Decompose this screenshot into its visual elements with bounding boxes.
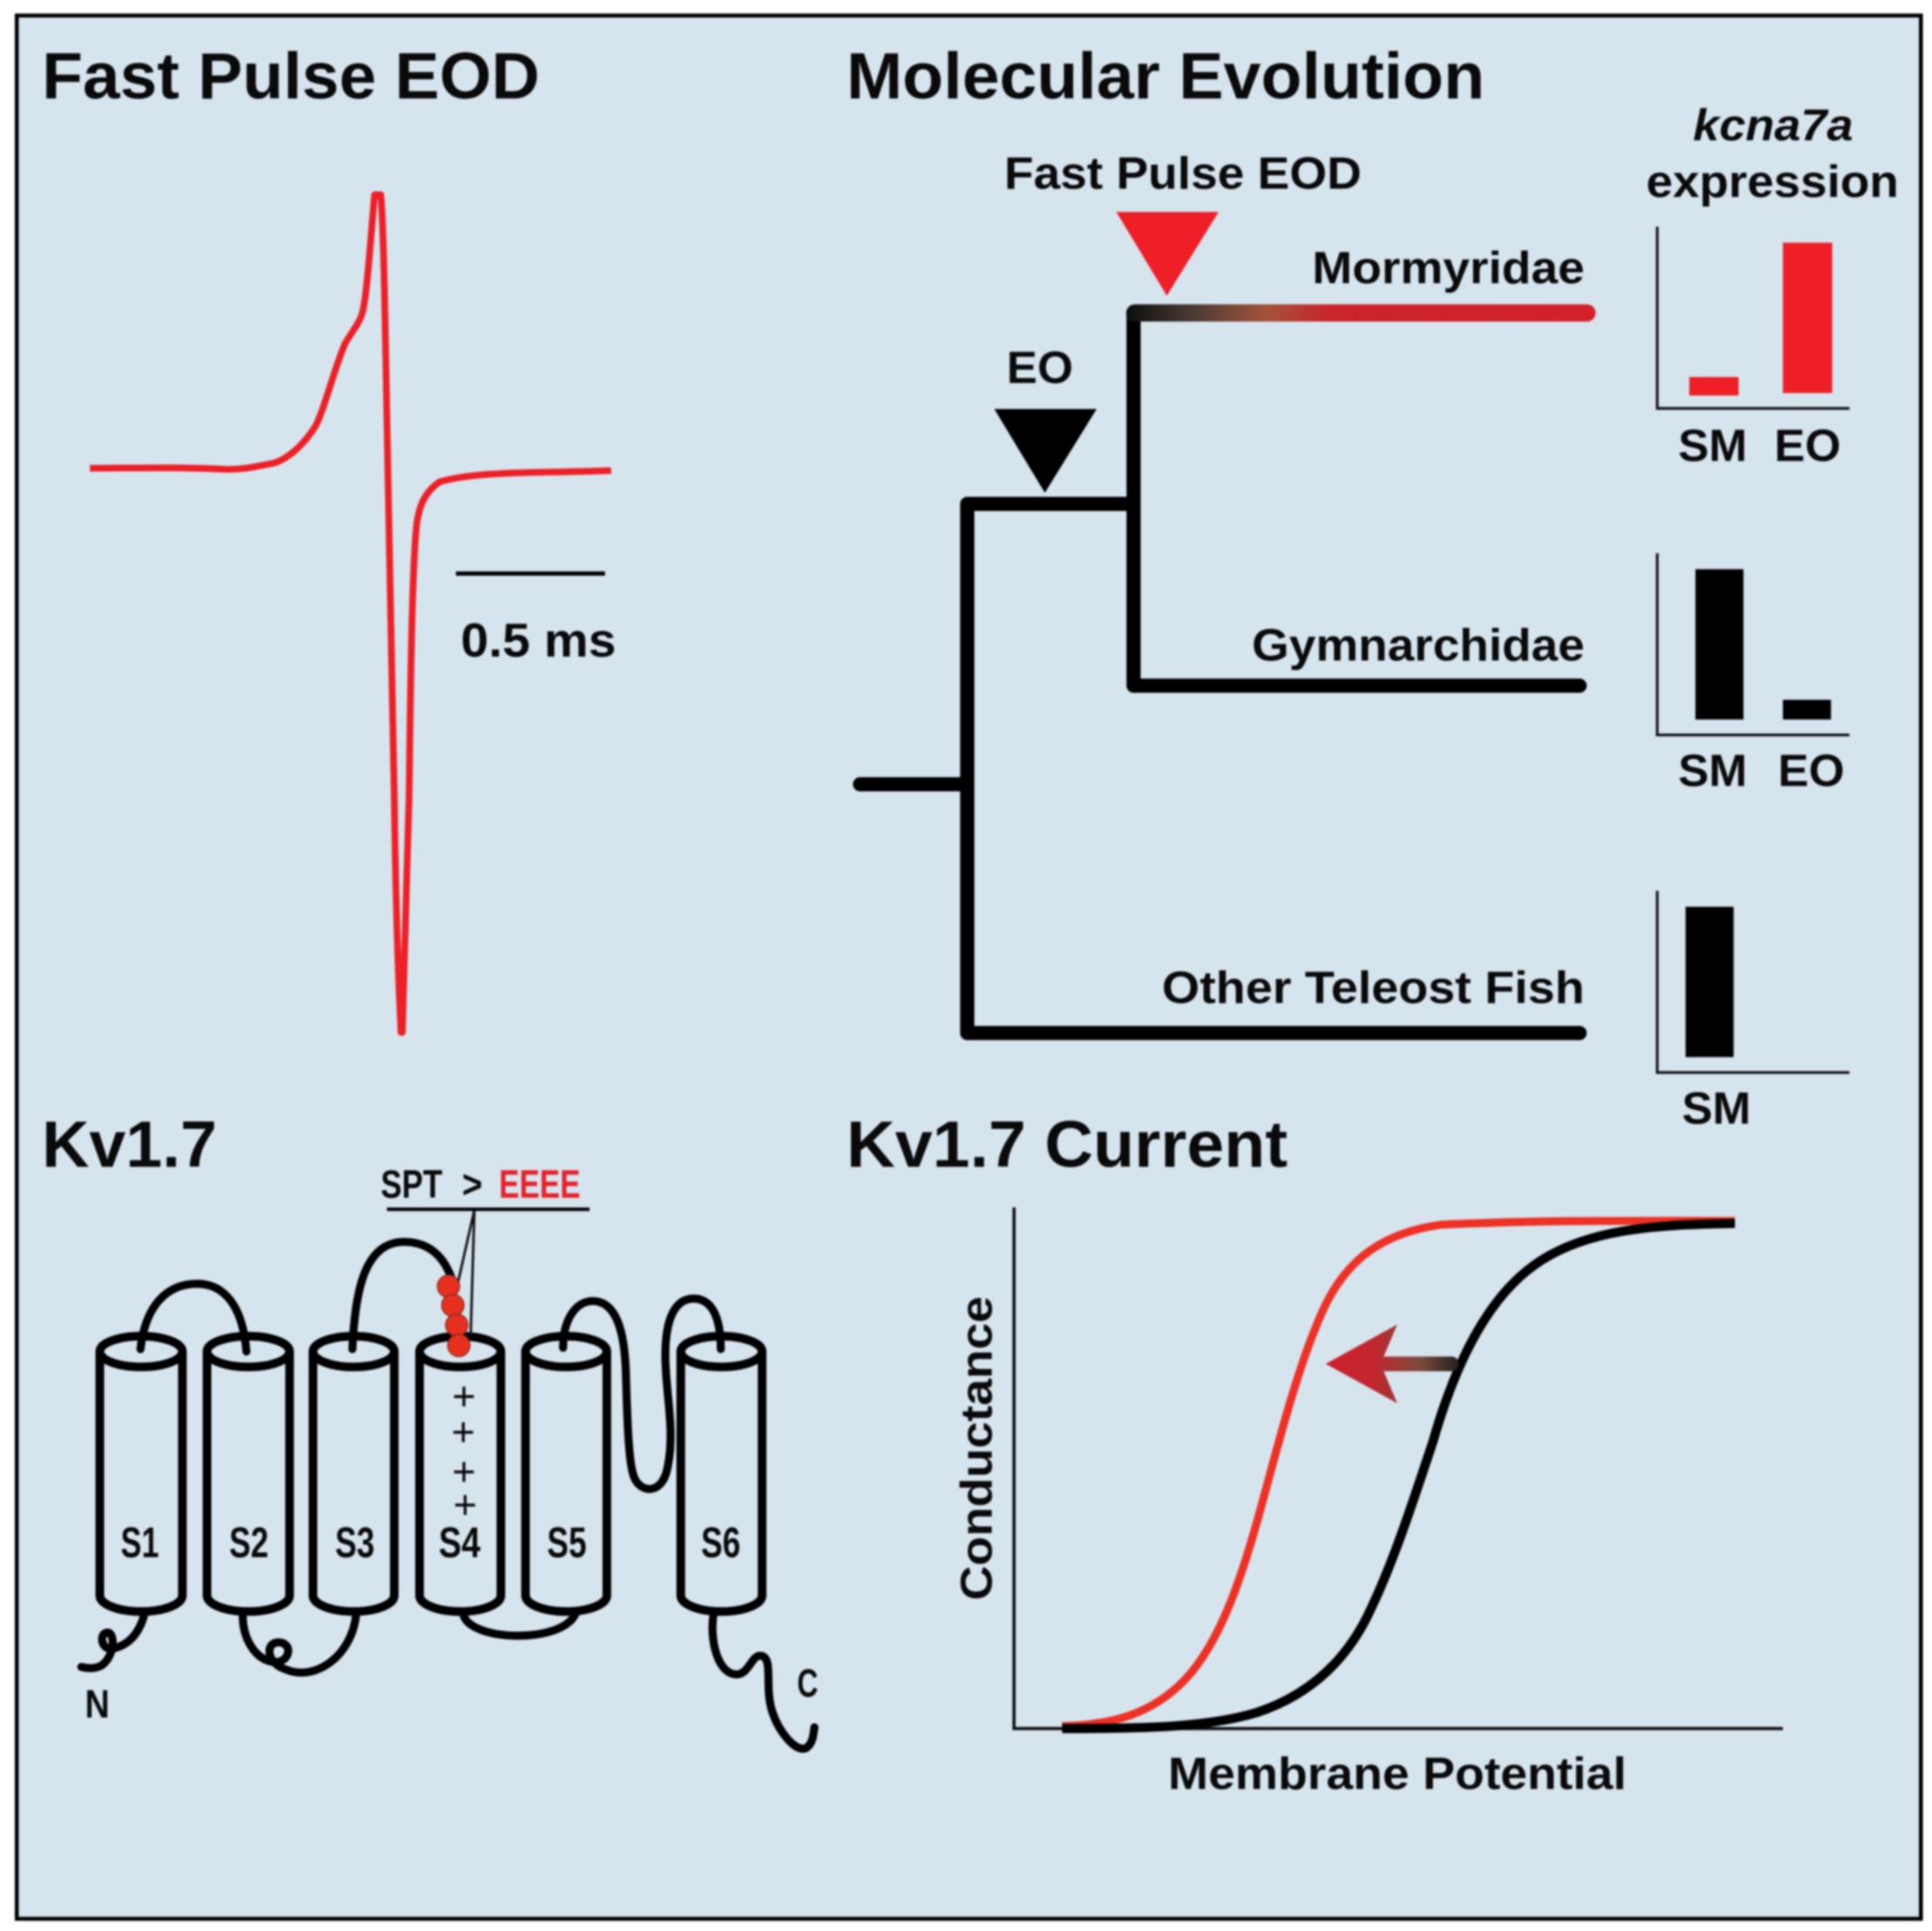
S4 positive charges: + [451, 1409, 475, 1454]
word expression: expression [1646, 157, 1899, 207]
axes [1657, 553, 1849, 735]
gene name: kcna7a [1693, 100, 1854, 150]
label SM: SM [1678, 421, 1747, 471]
helix S2: S2 [229, 1519, 268, 1567]
marker: EO black triangle [994, 409, 1096, 493]
mutation underline [387, 1208, 590, 1210]
helix S5: S5 [547, 1519, 586, 1567]
bar SM [1685, 907, 1733, 1057]
label: Mormyridae: Mormyridae [1312, 243, 1584, 294]
chart: EOD waveform [90, 194, 616, 1033]
x axis label: Membrane Potential [1168, 1749, 1626, 1799]
helix S6: S6 [702, 1519, 741, 1567]
axes [1014, 1208, 1783, 1729]
red EOD trace [90, 194, 611, 1033]
black curve [1062, 1223, 1735, 1729]
label SM: SM [1682, 1083, 1751, 1134]
chart: conductance curves [952, 1208, 1783, 1799]
N terminus label: N [85, 1682, 110, 1726]
C terminus label: C [797, 1661, 818, 1705]
heading: Molecular Evolution: Molecular Evolution [846, 39, 1485, 112]
marker: Fast Pulse EOD red triangle [1116, 212, 1218, 295]
helix S1: S1 [121, 1519, 159, 1567]
S4 positive charges [451, 1373, 477, 1528]
label: Fast Pulse EOD: Fast Pulse EOD [1004, 148, 1361, 199]
scale bar [456, 572, 605, 575]
S4 positive charges: + [453, 1482, 477, 1528]
helix S4: S4 [438, 1519, 481, 1567]
mutation residues [437, 1275, 470, 1357]
leader lines to mutation site [458, 1209, 474, 1336]
shift arrow [1325, 1325, 1459, 1403]
heading: Kv1.7 Current: Kv1.7 Current [846, 1108, 1288, 1181]
S4 positive charges: + [452, 1373, 476, 1419]
label: EO: EO [1007, 343, 1074, 394]
mutation label: SPT [381, 1162, 443, 1206]
mutation label: > [462, 1162, 483, 1206]
axes [1657, 227, 1849, 409]
label EO: EO [1778, 746, 1845, 796]
bar chart: Gymnarchidae expression [1657, 553, 1849, 796]
helix S4 [419, 1336, 501, 1611]
S4 positive charges: + [452, 1448, 476, 1494]
channel diagram: Kv1.7 topology [81, 1162, 818, 1749]
bar EO [1783, 700, 1831, 720]
connecting loops and tails [81, 1242, 815, 1749]
bar SM [1689, 377, 1739, 396]
mutation label: EEEE [499, 1162, 580, 1206]
y axis label: Conductance [952, 1296, 1001, 1601]
mutation label [381, 1162, 580, 1206]
axes [1657, 891, 1849, 1073]
bar chart: Other Teleost Fish expression [1657, 891, 1849, 1134]
scale label: 0.5 ms [461, 613, 616, 667]
helix S1 [100, 1336, 182, 1611]
label EO: EO [1774, 421, 1840, 471]
label SM: SM [1678, 746, 1747, 796]
phylogenetic tree [860, 148, 1587, 1033]
helix S6 [681, 1336, 763, 1611]
helix S3: S3 [336, 1519, 375, 1567]
gradient Mormyridae branch [1135, 307, 1587, 319]
helix S3 [313, 1336, 394, 1611]
heading: Kv1.7: Kv1.7 [42, 1108, 217, 1181]
bar EO [1783, 243, 1832, 393]
red shifted curve [1062, 1221, 1735, 1726]
label: Gymnarchidae: Gymnarchidae [1252, 620, 1584, 671]
black tree branches [860, 313, 1580, 1033]
heading: kcna7a expression [1646, 100, 1899, 207]
label: Other Teleost Fish: Other Teleost Fish [1162, 963, 1584, 1013]
helix S5 [525, 1336, 607, 1611]
heading: Fast Pulse EOD: Fast Pulse EOD [42, 39, 539, 112]
helix S2 [207, 1336, 289, 1611]
bar chart: Mormyridae expression [1657, 227, 1849, 471]
bar SM [1696, 569, 1744, 720]
